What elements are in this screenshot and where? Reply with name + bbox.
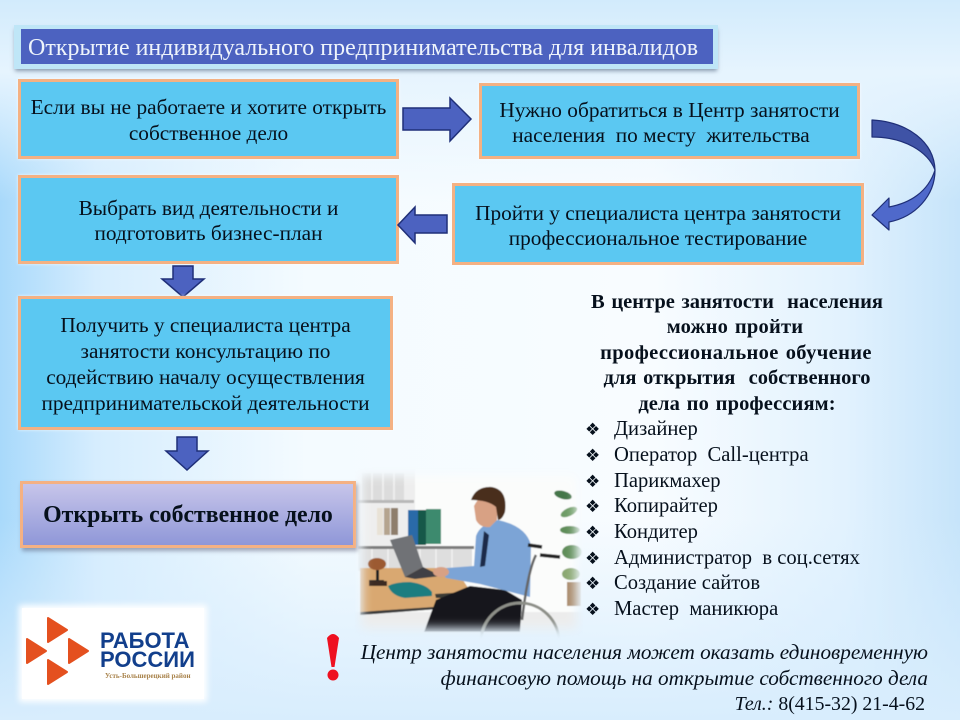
heading: vocational training: профессиональное обучение xyxy=(600,342,872,364)
list of professions: Копирайтер xyxy=(614,495,718,517)
logo: Работа России xyxy=(22,608,204,699)
list of professions: Администратор в соц.сетях xyxy=(614,547,860,569)
step: not working, want own business: Если вы не работаете и хотите открыть xyxy=(31,95,386,119)
title banner xyxy=(14,25,718,69)
step: consultation: предпринимательской деятельности xyxy=(41,391,370,415)
step: not working, want own business: собственное дело xyxy=(129,120,288,144)
list of professions: Мастер маникюра xyxy=(614,598,778,620)
note: financial help and phone: Тел.: 8(415-32) 21-4-62 xyxy=(735,693,925,715)
list of professions: Создание сайтов xyxy=(614,572,760,594)
list of professions: ❖ xyxy=(585,472,600,492)
result: open own business xyxy=(20,481,356,548)
step: professional testing: профессиональное тестирование xyxy=(509,226,807,250)
step: not working, want own business xyxy=(18,79,399,159)
step: contact employment centre: Нужно обратиться в Центр занятости xyxy=(499,98,840,122)
title banner: Открытие индивидуального предпринимательства для инвалидов xyxy=(28,35,698,61)
note: financial help and phone: финансовую помощь на открытие собственного дела xyxy=(441,666,928,690)
list of professions: ❖ xyxy=(585,497,600,517)
list of professions: ❖ xyxy=(585,420,600,440)
note: financial help and phone xyxy=(360,640,928,715)
step: consultation: содействию началу осуществления xyxy=(46,365,365,389)
list of professions: ❖ xyxy=(585,549,600,569)
list of professions: ❖ xyxy=(585,574,600,594)
step: choose activity, business plan xyxy=(18,175,399,264)
step: professional testing xyxy=(452,183,864,265)
step: contact employment centre xyxy=(479,83,860,159)
photo: man in wheelchair at desk xyxy=(356,474,582,635)
step: consultation: занятости консультацию по xyxy=(81,339,330,363)
list of professions: ❖ xyxy=(585,446,600,466)
heading: vocational training: можно пройти xyxy=(667,316,803,338)
step: contact employment centre: населения по месту жительства xyxy=(512,123,810,147)
note: financial help and phone: Центр занятости населения может оказать единовременную xyxy=(361,640,928,664)
step: consultation xyxy=(18,296,393,430)
list of professions: Кондитер xyxy=(614,521,698,543)
heading: vocational training: дела по профессиям: xyxy=(638,393,836,415)
result: open own business: Открыть собственное дело xyxy=(43,502,333,528)
list of professions: ❖ xyxy=(585,523,600,543)
logo: Работа России: РАБОТА xyxy=(100,628,190,653)
step: choose activity, business plan: подготовить бизнес-план xyxy=(94,221,323,245)
logo: Работа России: Усть-Большерецкий район xyxy=(105,672,190,680)
list of professions: ❖ xyxy=(585,600,600,620)
heading: vocational training xyxy=(591,291,883,415)
list of professions: Парикмахер xyxy=(614,470,721,492)
logo: Работа России: РОССИИ xyxy=(100,647,195,672)
heading: vocational training: В центре занятости населения xyxy=(591,291,883,313)
list of professions: Дизайнер xyxy=(614,418,698,440)
step: choose activity, business plan: Выбрать вид деятельности и xyxy=(79,196,338,220)
list of professions: Оператор Call-центра xyxy=(614,444,809,466)
step: professional testing: Пройти у специалиста центра занятости xyxy=(475,201,841,225)
step: consultation: Получить у специалиста центра xyxy=(60,313,351,337)
heading: vocational training: для открытия собственного xyxy=(604,367,870,389)
